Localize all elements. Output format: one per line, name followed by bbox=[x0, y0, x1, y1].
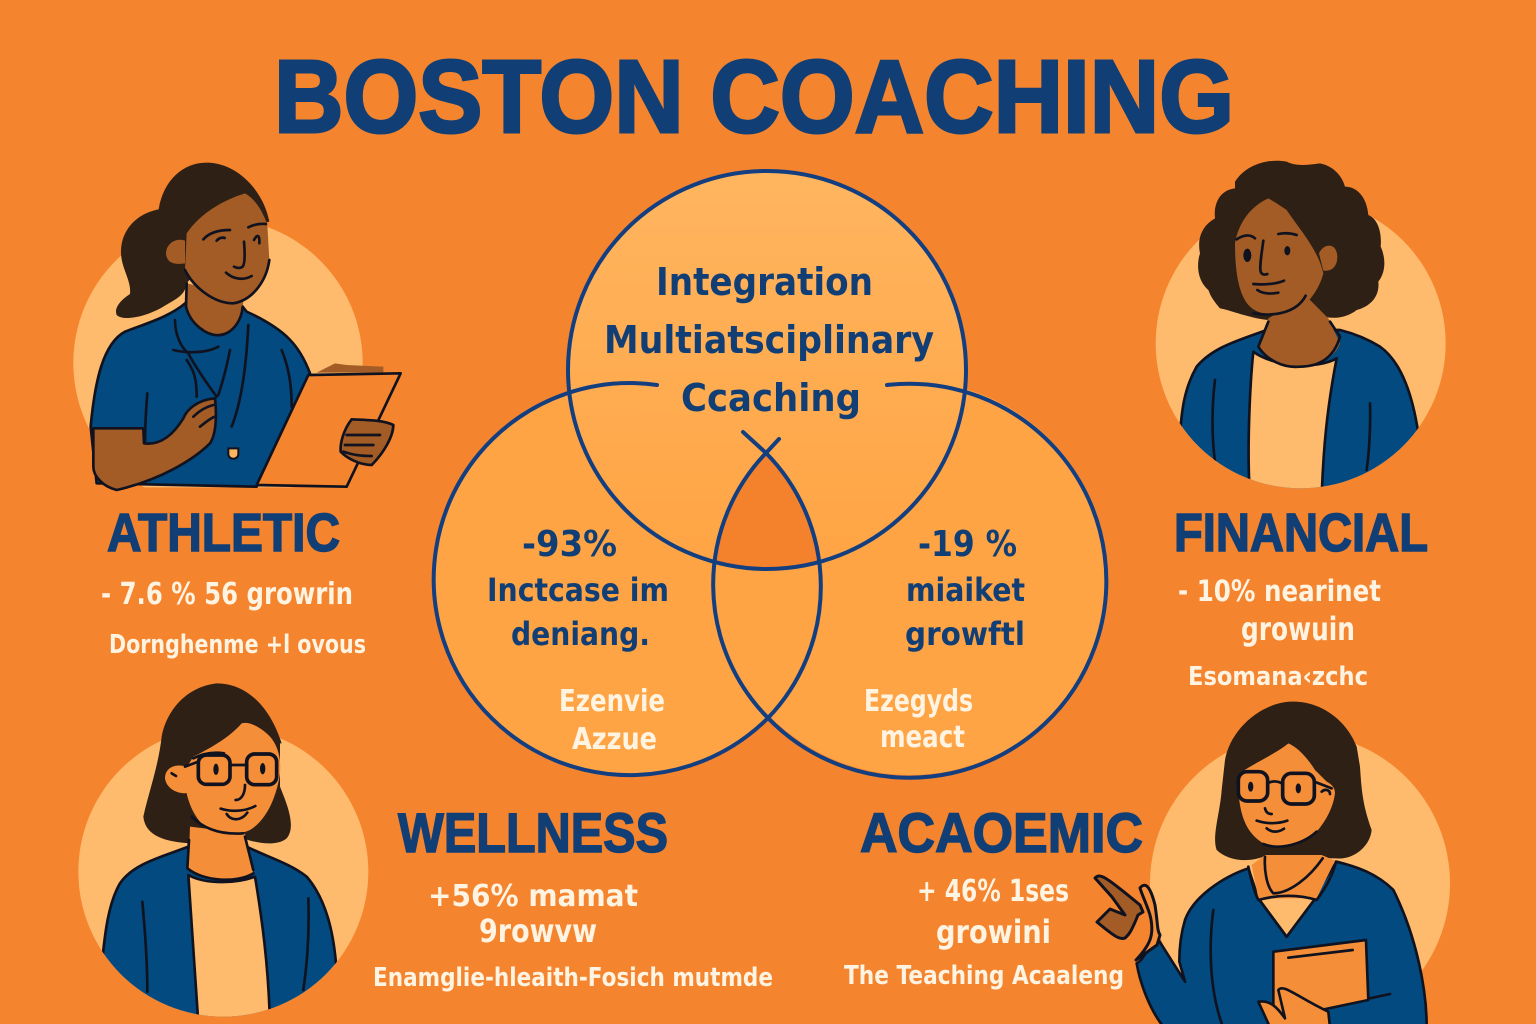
venn text: left stat: Azzue bbox=[572, 722, 657, 757]
text block: wellness: Enamglie-hleaith-Fosich mutmde bbox=[373, 963, 773, 993]
venn text: right stat: -19 % bbox=[918, 524, 1017, 565]
title: BOSTON COACHING bbox=[274, 39, 1234, 154]
venn text: integration bbox=[604, 260, 934, 420]
text block: athletic: Dornghenme +l ovous bbox=[109, 630, 366, 660]
text block: wellness: 9rowvw bbox=[479, 912, 597, 950]
text block: financial: - 10% nearinet bbox=[1178, 574, 1381, 608]
venn text: left stat bbox=[487, 524, 669, 757]
heading: wellness: WELLNESS bbox=[398, 801, 668, 864]
venn circle: left bbox=[434, 383, 821, 775]
venn diagram bbox=[434, 171, 1107, 778]
venn text: integration: Integration bbox=[656, 260, 873, 304]
figure: wellness coach bbox=[78, 683, 368, 1023]
venn circle: top bbox=[568, 171, 966, 569]
text block: academic bbox=[844, 874, 1124, 991]
text block: athletic bbox=[101, 577, 366, 660]
text block: academic: growini bbox=[936, 913, 1051, 951]
venn text: right stat: miaiket bbox=[906, 571, 1025, 609]
text block: academic: + 46% 1ses bbox=[917, 874, 1069, 909]
text block: wellness: +56% mamat bbox=[428, 879, 638, 914]
venn text: left stat: deniang. bbox=[511, 615, 650, 653]
text block: financial: Esomana‹zchc bbox=[1188, 662, 1368, 692]
venn text: right stat bbox=[864, 524, 1025, 755]
figure: financial coach bbox=[1156, 161, 1446, 497]
venn text: integration: Multiatsciplinary bbox=[604, 318, 934, 362]
heading: financial: FINANCIAL bbox=[1174, 503, 1428, 563]
text block: athletic: - 7.6 % 56 growrin bbox=[101, 577, 353, 612]
text block: academic: The Teaching Acaaleng bbox=[844, 961, 1124, 991]
text block: financial: growuin bbox=[1241, 610, 1355, 648]
heading: academic: ACAOEMIC bbox=[860, 801, 1143, 864]
figure: athletic coach bbox=[73, 163, 401, 508]
text block: wellness bbox=[373, 879, 773, 993]
venn text: left stat: Ezenvie bbox=[559, 684, 665, 719]
venn text: right stat: meact bbox=[880, 720, 965, 755]
venn text: left stat: -93% bbox=[522, 524, 617, 565]
venn circle: right bbox=[713, 384, 1106, 778]
venn text: integration: Ccaching bbox=[681, 376, 861, 420]
venn text: right stat: Ezegyds bbox=[864, 684, 973, 719]
icon: pointing hand bbox=[1095, 876, 1160, 960]
figure: academic coach bbox=[1137, 702, 1450, 1024]
venn text: right stat: growftl bbox=[905, 615, 1025, 653]
venn text: left stat: Inctcase im bbox=[487, 571, 669, 609]
heading: athletic: ATHLETIC bbox=[107, 503, 340, 563]
text block: financial bbox=[1178, 574, 1381, 692]
